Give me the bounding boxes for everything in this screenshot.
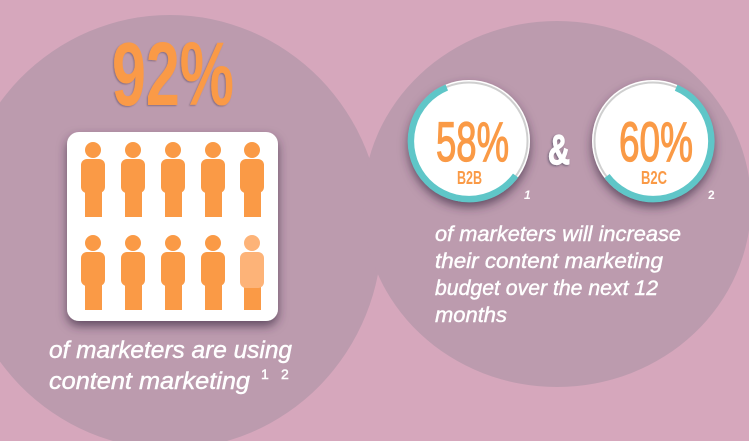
value: 58%: 58% [436,110,509,173]
chart: B2C donut [592,80,714,202]
chart: B2B donut [408,80,530,202]
ampersand: & [548,126,570,173]
text: of marketers are using content marketing [49,337,293,395]
footnote: 2: 2 [708,188,715,202]
text: of marketers are using content marketing: content marketing [49,368,251,395]
label: B2B: B2B [457,168,482,188]
panel: right circle [363,21,749,387]
icon: people bottom row [81,235,264,310]
card background [67,132,278,321]
text: of marketers will increase their budget: months [435,303,507,327]
text: of marketers will increase their budget: budget over the next 12 [435,276,658,300]
heading: 92%: 92% [112,25,234,125]
text: of marketers will increase their budget: their content marketing [435,249,663,273]
panel: left circle [0,15,382,441]
text: of marketers are using content marketing: of marketers are using [49,337,293,364]
panel: people card [67,132,278,321]
label: B2C: B2C [641,168,667,188]
icon: people top row [81,142,264,217]
text: of marketers are using content marketing: 1 [261,366,269,382]
text: of marketers will increase their budget [435,222,681,327]
text: of marketers will increase their budget: of marketers will increase [435,222,681,246]
value: 60%: 60% [619,110,693,173]
text: of marketers are using content marketing: 2 [281,366,289,382]
footnote: 1: 1 [524,188,531,202]
